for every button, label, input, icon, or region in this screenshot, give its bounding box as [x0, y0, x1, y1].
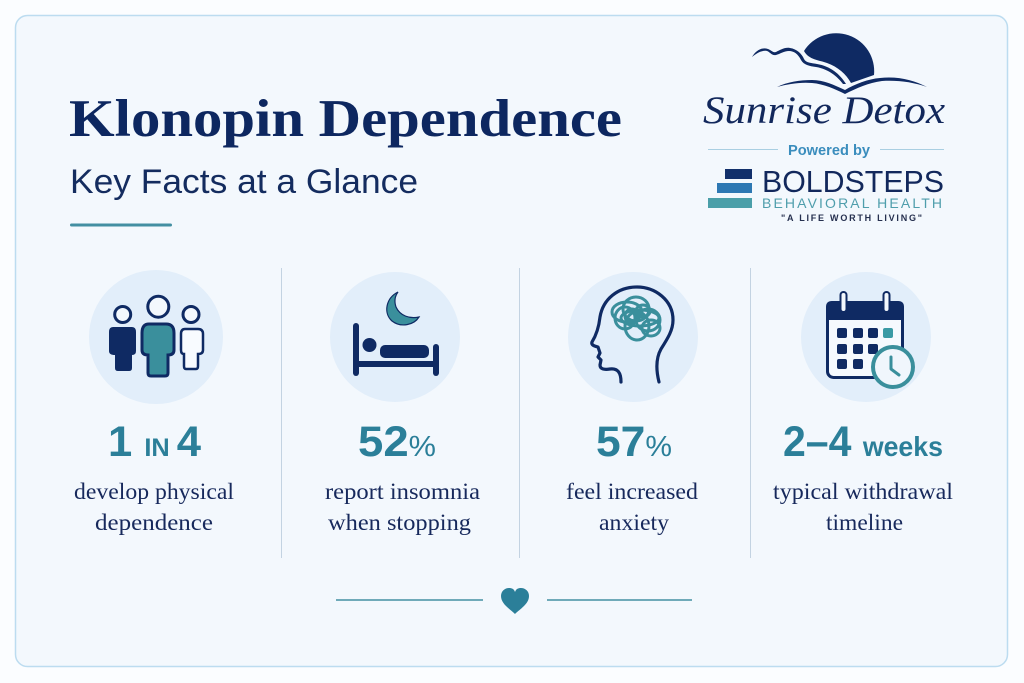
description — [74, 479, 234, 535]
description: when stopping — [328, 510, 472, 535]
title: Klonopin Dependence — [69, 90, 622, 148]
logo wordmark: Sunrise Detox: Sunrise Detox — [703, 89, 946, 132]
stat: 52%: 52% — [358, 418, 436, 466]
description — [773, 479, 953, 535]
stat: 2-4 weeks: 2–4 weeks — [783, 418, 943, 466]
stat: 1 in 4: 1 IN 4 — [108, 418, 201, 466]
description — [566, 479, 699, 535]
footer ornament — [336, 588, 692, 614]
description: report insomnia — [325, 479, 480, 504]
divider lines — [281, 268, 282, 558]
description: develop physical — [74, 479, 234, 504]
icon: sunrise mark — [752, 33, 927, 94]
description: anxiety — [599, 510, 670, 535]
logo subline: behavioral health: BEHAVIORAL HEALTH — [762, 195, 942, 211]
description: feel increased — [566, 479, 699, 504]
heading underline — [70, 224, 172, 226]
logo: Sunrise Detox and Boldsteps — [703, 33, 946, 223]
icon: heart — [501, 588, 529, 614]
description: timeline — [826, 510, 903, 535]
powered by: Powered by — [788, 143, 870, 159]
logo tagline: "A LIFE WORTH LIVING" — [781, 213, 922, 223]
description: typical withdrawal — [773, 479, 953, 504]
icon: calendar and clock — [801, 272, 931, 402]
description: dependence — [95, 510, 213, 535]
icon: stacked steps — [708, 169, 752, 208]
panel: 57% — [566, 272, 699, 535]
icon: bed and moon — [330, 272, 460, 402]
panel: 1 in 4 — [74, 270, 234, 535]
stat: 57%: 57% — [596, 418, 672, 466]
description — [325, 479, 480, 535]
icon: three people — [89, 270, 223, 404]
logo wordmark: Boldsteps: BOLDSTEPS — [762, 164, 944, 199]
panel: 52% — [325, 272, 480, 535]
icon: head with tangled thoughts — [568, 272, 698, 402]
panel: 2-4 weeks — [773, 272, 953, 535]
subtitle: Key Facts at a Glance — [70, 163, 418, 201]
